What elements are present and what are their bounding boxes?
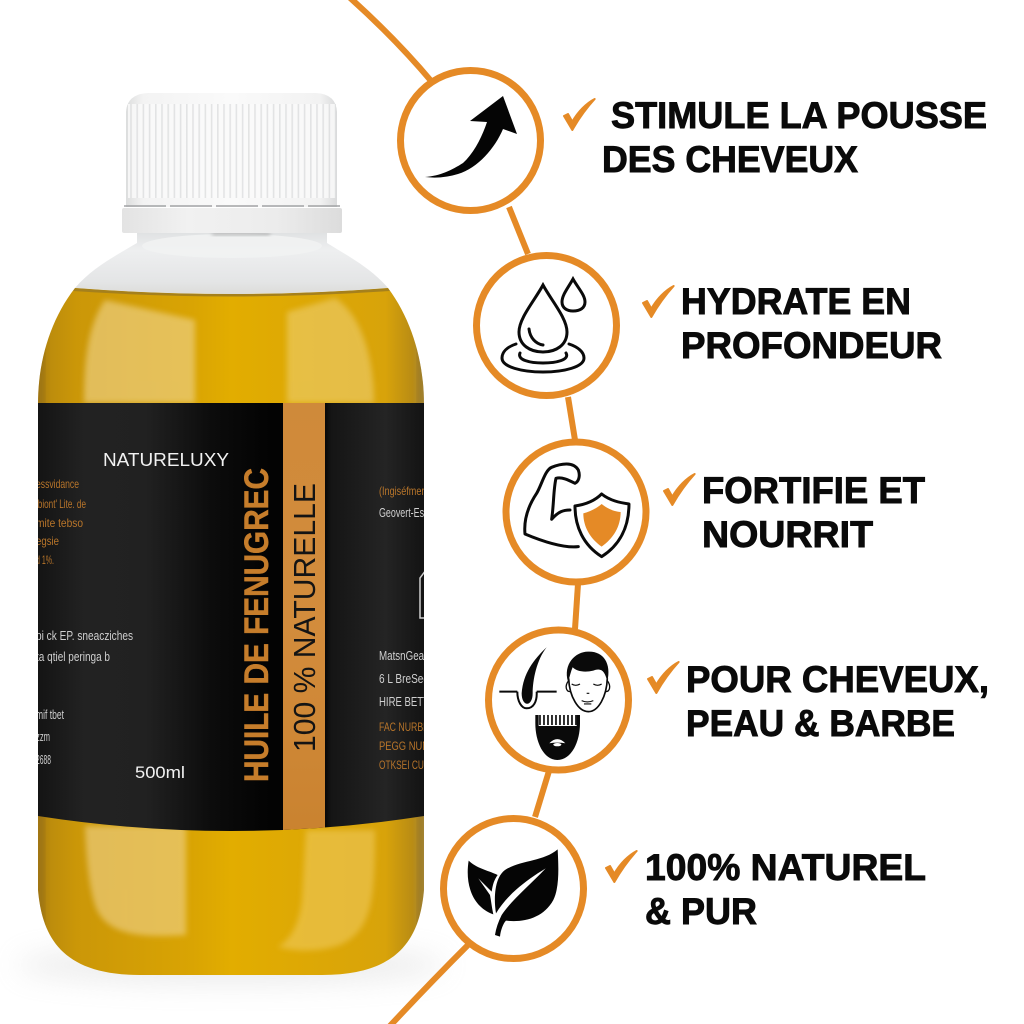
strip claim: 100 % NATURELLE xyxy=(287,483,322,752)
check mark xyxy=(664,474,695,505)
benefit text xyxy=(602,95,987,180)
benefit 2 xyxy=(476,256,942,396)
right small text: HIRE BETT xyxy=(379,694,429,709)
benefit text: STIMULE LA POUSSE xyxy=(611,95,987,136)
benefit 5 xyxy=(444,818,926,958)
black label xyxy=(36,403,430,843)
benefit text: POUR CHEVEUX, xyxy=(686,659,989,700)
volume: 500ml xyxy=(135,764,185,782)
right small text xyxy=(379,486,424,769)
benefit text: PEAU & BARBE xyxy=(686,703,955,744)
left small white text xyxy=(36,628,133,767)
brand name: NATURELUXY xyxy=(103,450,229,470)
icon: growth arrow xyxy=(400,70,540,210)
right small text: (Ingiséfment xyxy=(379,484,430,498)
benefit text: FORTIFIE ET xyxy=(702,470,925,511)
right small text: OTKSEI CUT xyxy=(379,758,429,772)
benefit 3 xyxy=(506,442,925,582)
icon: hair, face and beard xyxy=(488,630,628,770)
benefit text: DES CHEVEUX xyxy=(602,139,858,180)
orange strip xyxy=(283,403,325,843)
left small white text: 2688 xyxy=(36,752,51,767)
left small white text: mif tbet xyxy=(36,707,64,722)
bottle neck xyxy=(142,232,322,258)
benefit text: HYDRATE EN xyxy=(681,281,911,322)
right small text: MatsnGeas xyxy=(379,648,429,663)
icon: leaves xyxy=(444,818,584,958)
product name: HUILE DE FENUGREC xyxy=(238,468,276,782)
left small white text: pi ck EP. sneacziches xyxy=(36,628,133,643)
left small white text: zzm xyxy=(36,729,50,744)
ground shadow xyxy=(16,947,446,983)
connector line xyxy=(348,0,578,1024)
benefit text: PROFONDEUR xyxy=(681,325,942,366)
benefit 1 xyxy=(400,70,987,210)
right small text: FAC NURBE xyxy=(379,720,429,734)
left small orange text: mite tebso xyxy=(36,516,83,530)
benefit text xyxy=(645,847,926,932)
benefit text: 100% NATUREL xyxy=(645,847,926,888)
bottle shoulder glass xyxy=(75,232,388,294)
benefit text xyxy=(681,281,942,366)
left small orange text: essvidance xyxy=(36,477,79,491)
check mark xyxy=(643,286,674,317)
check mark xyxy=(648,662,679,693)
right small text: Geovert-Esp xyxy=(379,505,429,520)
right small text: 6 L BreSeg xyxy=(379,671,429,686)
left small white text: ta qtiel peringa b xyxy=(36,649,110,664)
check mark xyxy=(606,851,637,882)
bottle xyxy=(16,93,446,983)
left small orange text: egsie xyxy=(36,534,59,548)
oil liquid xyxy=(38,284,424,976)
left small orange text: d 1%. xyxy=(36,553,54,567)
benefit text xyxy=(686,659,989,744)
benefit text: & PUR xyxy=(645,891,757,932)
benefit text xyxy=(702,470,925,555)
cap xyxy=(122,93,342,233)
left small orange text: ibiont' Lite. de xyxy=(36,497,86,511)
left small orange text xyxy=(38,480,86,564)
benefit text: NOURRIT xyxy=(702,514,873,555)
icon: arm and shield xyxy=(506,442,646,582)
benefit 4 xyxy=(488,630,989,770)
right small text: PEGG NUN xyxy=(379,739,429,753)
icon: water drops xyxy=(476,256,616,396)
check mark xyxy=(564,99,595,130)
